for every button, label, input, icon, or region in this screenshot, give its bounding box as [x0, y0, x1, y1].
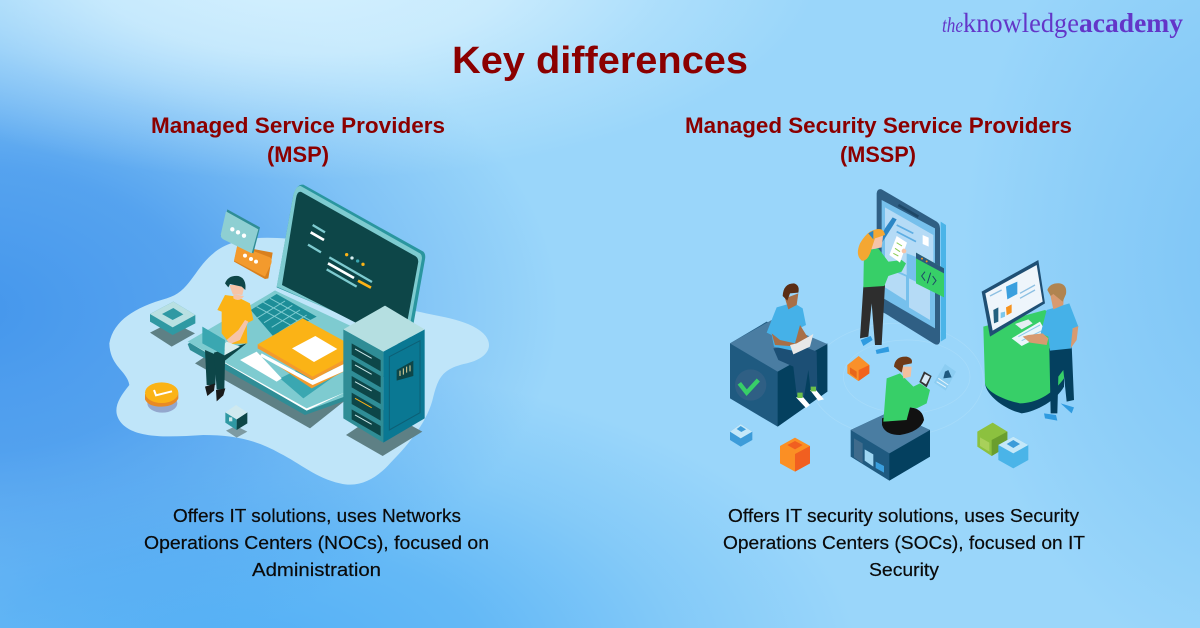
- text block: MSP description: Offers IT solutions, uses Networks: [173, 505, 461, 526]
- man at monitor: [1023, 283, 1078, 421]
- heading: Managed Service Providers (MSP): [151, 113, 445, 167]
- woman at tablet: [858, 217, 907, 354]
- text block: MSP description: [144, 505, 489, 580]
- server shadow: [346, 410, 422, 456]
- connecting rings: [810, 323, 983, 437]
- text block: MSSP description: [723, 505, 1085, 580]
- heading: Managed Service Providers (MSP): (MSP): [267, 142, 329, 167]
- laptop base: [188, 291, 417, 415]
- router box: [150, 302, 195, 347]
- block with check and seated man: [730, 283, 827, 427]
- keyboard: [251, 294, 317, 338]
- laptop screen: [277, 185, 425, 347]
- green cube: [977, 423, 1007, 456]
- check badge: [145, 382, 178, 413]
- logo: the knowledge academy: academy: [1079, 8, 1184, 38]
- text block: MSSP description: Operations Centers (SOCs), focused on IT: [723, 532, 1085, 553]
- text block: MSP description: Administration: [252, 559, 381, 580]
- orange cube centre: [847, 356, 869, 381]
- kiosk and monitor: [982, 260, 1064, 413]
- heading: Managed Security Service Providers (MSSP): [685, 113, 1072, 167]
- illustration: MSSP team and devices: [730, 189, 1078, 481]
- laptop shadow: [195, 357, 350, 428]
- text block: MSSP description: Offers IT security solutions, uses Security: [728, 505, 1080, 526]
- text block: MSP description: Operations Centers (NOCs), focused on: [144, 532, 489, 553]
- heading: Managed Service Providers (MSP): Managed Service Providers: [151, 113, 445, 138]
- server rack: [343, 306, 425, 443]
- man with phone on block: [851, 357, 956, 481]
- title: Key differences: [452, 40, 748, 82]
- code window: [916, 253, 944, 297]
- person in yellow shirt: [202, 276, 253, 401]
- blue cube left: [730, 424, 752, 447]
- logo: the knowledge academy: knowledge: [963, 8, 1079, 38]
- blob background: [109, 238, 489, 485]
- heading: Managed Security Service Providers (MSSP): (MSSP): [840, 142, 916, 167]
- small cube: [225, 405, 247, 438]
- logo: the knowledge academy: the: [942, 13, 963, 37]
- text block: MSSP description: Security: [869, 559, 940, 580]
- orange chat bubble: [234, 245, 273, 279]
- illustration: MSP laptop and server: [109, 185, 489, 485]
- orange cube bottom: [780, 438, 810, 472]
- books: [258, 318, 348, 388]
- logo: the knowledge academy: [942, 8, 1184, 38]
- teal chat bubble: [221, 209, 260, 253]
- heading: Managed Security Service Providers (MSSP): Managed Security Service Providers: [685, 113, 1072, 138]
- blue cube right: [998, 437, 1028, 468]
- tablet device: [877, 189, 946, 345]
